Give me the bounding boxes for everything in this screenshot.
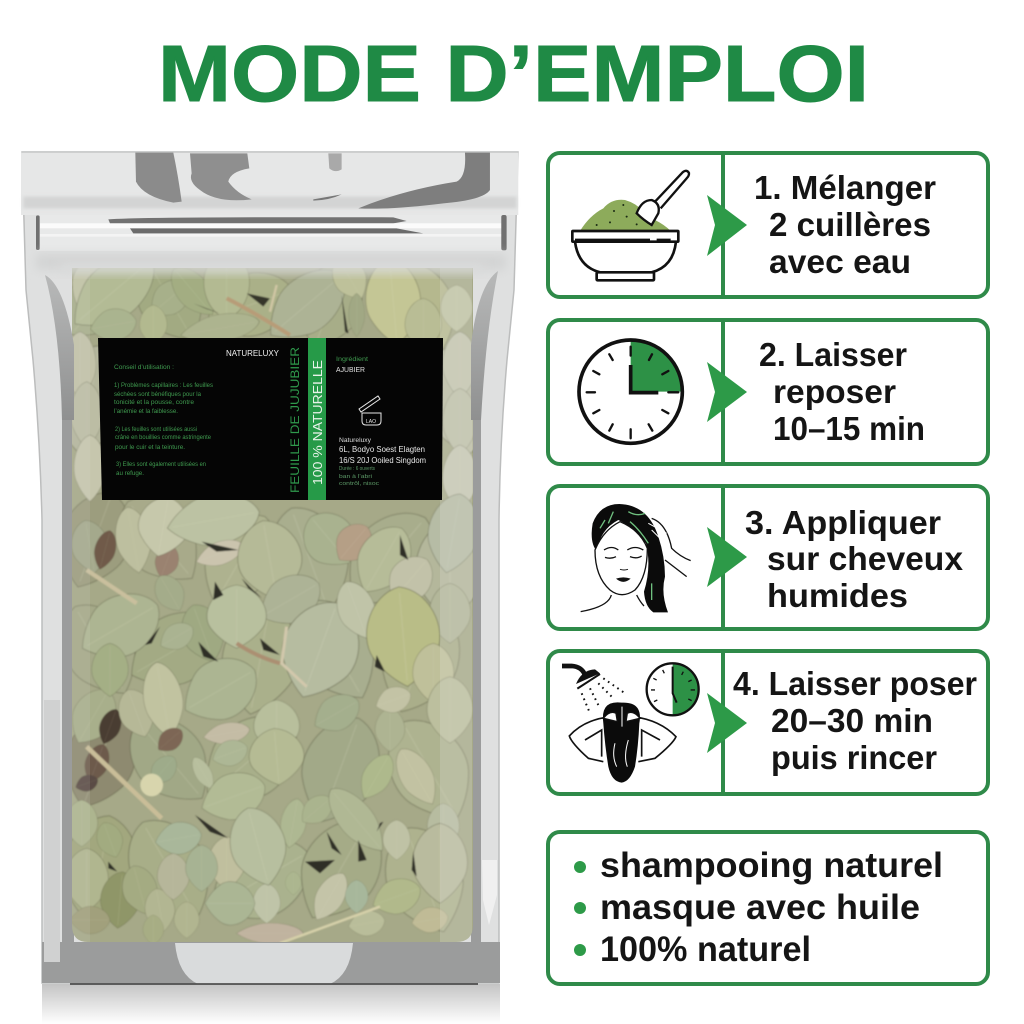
frosted edge over leaves	[60, 263, 484, 273]
step 3 text: humides	[767, 577, 908, 614]
step 4 text: puis rincer	[771, 739, 937, 776]
usage advice text: 2) Les feuilles sont utilisées aussi	[115, 426, 197, 433]
ingredient block: Ingrédient	[336, 356, 368, 363]
bullet: masque: masque avec huile	[600, 888, 920, 927]
usage advice text: séchées sont bénéfiques pour la	[114, 391, 201, 398]
icon: bowl with powder and spoon	[572, 171, 689, 280]
lower leaves	[65, 726, 467, 945]
step 3 text: sur cheveux	[767, 540, 964, 577]
step 1 text: avec eau	[769, 243, 911, 280]
vertical product name: FEUILLE DE JUJUBIER	[288, 347, 302, 493]
step 1 text: 1. Mélanger	[754, 169, 936, 206]
step 2 text: 2. Laisser	[759, 336, 907, 373]
bullet: shampooing: shampooing naturel	[600, 846, 943, 885]
address block: Natureluxy	[339, 437, 372, 444]
icon: open jar	[359, 396, 381, 425]
usage advice text: pour le cuir et la teinture.	[115, 444, 185, 451]
panel: step 2	[548, 320, 988, 464]
step 2 text	[759, 336, 925, 447]
icon: clock	[579, 340, 682, 443]
address block: ban à l’abri	[339, 474, 372, 480]
zip closure	[36, 215, 507, 251]
step 4 text: 4. Laisser poser	[733, 665, 977, 702]
ingredient block	[336, 356, 368, 374]
pouch body	[22, 152, 518, 983]
title: MODE D’EMPLOI	[158, 29, 869, 118]
upper leaves	[72, 268, 473, 501]
bottom notch	[175, 943, 353, 984]
frosted band under zip	[36, 254, 506, 270]
address block: Durée : 6 ouverts	[339, 466, 375, 472]
step 2 text: reposer	[773, 373, 896, 410]
arrow	[707, 693, 747, 753]
address block: 6L, Bodyo Soest Elagten	[339, 445, 425, 454]
usage advice text: tonicité et la pousse, contre	[114, 399, 194, 406]
step 4 text	[733, 665, 977, 776]
label background	[98, 338, 443, 500]
icon: woman applying to hair	[581, 504, 691, 612]
panel: step 3	[548, 486, 988, 629]
translucent reflections on leaves	[440, 268, 472, 942]
usage advice text: au refuge.	[116, 470, 144, 477]
upper gusset shadows	[45, 271, 498, 420]
step 1 text	[754, 169, 936, 280]
side light strips	[44, 700, 497, 962]
usage advice text: l’anémie et la faiblesse.	[114, 408, 178, 415]
bullet: naturel: 100% naturel	[600, 930, 811, 969]
underlay of large leaves	[72, 273, 473, 932]
address block: contrôl, nisoc	[339, 481, 379, 487]
step 2 text: 10–15 min	[773, 410, 925, 447]
arrow	[707, 195, 747, 256]
pouch base line	[70, 983, 478, 985]
icon: open jar: LAO	[366, 419, 376, 425]
leaves window	[72, 268, 473, 942]
product pouch	[21, 152, 518, 1024]
product label	[98, 338, 443, 500]
panel: benefits list	[548, 832, 988, 984]
panel: step 1	[548, 153, 988, 297]
step 3 text	[745, 504, 964, 614]
step 1 text: 2 cuillères	[769, 206, 931, 243]
vertical claim: 100 % NATURELLE	[311, 360, 325, 485]
top header with reflections	[21, 153, 518, 215]
step 4 text: 20–30 min	[771, 702, 933, 739]
floor shadow	[42, 984, 500, 1024]
usage advice text: crâne en bouillies comme astringente	[115, 434, 211, 441]
arrow	[707, 527, 747, 587]
brand name: NATURELUXY	[226, 348, 279, 358]
grey inner bands and base	[42, 340, 500, 983]
usage advice text: Conseil d’utilisation :	[114, 364, 174, 371]
icon: shower, timer and rinsing	[562, 663, 699, 783]
usage advice text: 1) Problèmes capillaires : Les feuilles	[114, 382, 214, 389]
green strip	[308, 338, 326, 500]
panel: step 4	[548, 651, 988, 794]
middle leaves	[60, 487, 485, 758]
usage advice text	[114, 364, 214, 477]
address block	[339, 437, 426, 487]
usage advice text: 3) Elles sont également utilisées en	[116, 461, 206, 468]
address block: 16/S 20J Ooiled Singdom	[339, 456, 426, 465]
step 3 text: 3. Appliquer	[745, 504, 941, 541]
arrow	[707, 362, 747, 422]
ingredient block: AJUBIER	[336, 367, 365, 374]
